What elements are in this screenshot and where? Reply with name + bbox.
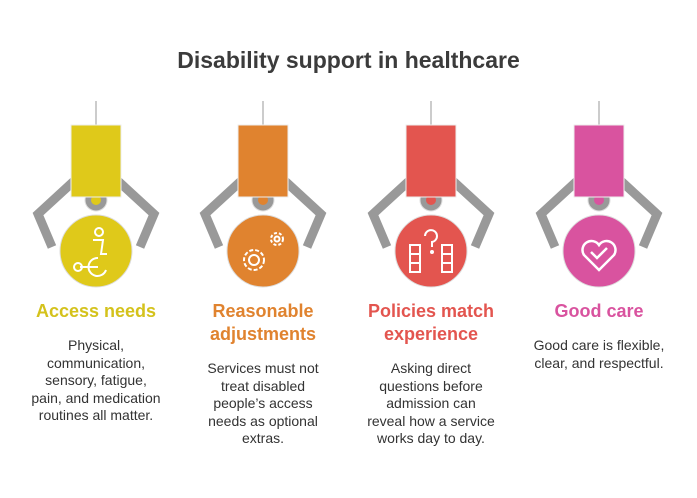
- column: good care: Good care is flexible,: [534, 337, 664, 353]
- column: policies match experience: works day to day.: [377, 430, 485, 446]
- column: policies match experience: questions before: [379, 378, 483, 394]
- column: reasonable adjustments: needs as optional: [208, 413, 318, 429]
- column: access needs: Physical,: [68, 337, 124, 353]
- column: access needs: communication,: [47, 355, 145, 371]
- column: access needs: routines all matter.: [39, 407, 153, 423]
- column: policies match experience: experience: [384, 324, 478, 344]
- column: policies match experience: reveal how a service: [367, 413, 495, 429]
- claw: access needs: [38, 101, 154, 287]
- icon: gears: [244, 233, 283, 270]
- column: policies match experience: Policies match: [368, 301, 494, 321]
- claws graphic: [32, 101, 662, 288]
- column: reasonable adjustments: people’s access: [213, 395, 313, 411]
- column: access needs: sensory, fatigue,: [45, 372, 147, 388]
- column: good care: clear, and respectful.: [534, 355, 664, 371]
- column: access needs: Access needs: [36, 301, 156, 321]
- icon: question columns: [410, 230, 452, 272]
- column: access needs: [31, 301, 161, 423]
- claw: reasonable adjustments: [205, 101, 321, 287]
- column: reasonable adjustments: Services must not: [207, 360, 319, 376]
- claw: policies: [373, 101, 489, 287]
- column: policies match experience: [367, 301, 495, 446]
- title: Disability support in healthcare: [177, 47, 520, 73]
- column: good care: Good care: [554, 301, 644, 321]
- column: reasonable adjustments: adjustments: [210, 324, 316, 344]
- icon: wheelchair: [74, 228, 107, 276]
- claw: good care: [541, 101, 657, 287]
- column: reasonable adjustments: extras.: [242, 430, 284, 446]
- column: policies match experience: Asking direct: [391, 360, 471, 376]
- column: good care: [534, 301, 664, 371]
- column: reasonable adjustments: [207, 301, 319, 446]
- icon: heart: [582, 241, 616, 270]
- column: reasonable adjustments: treat disabled: [221, 378, 305, 394]
- column: policies match experience: admission can: [386, 395, 476, 411]
- column: access needs: pain, and medication: [31, 390, 161, 406]
- column: reasonable adjustments: Reasonable: [212, 301, 314, 321]
